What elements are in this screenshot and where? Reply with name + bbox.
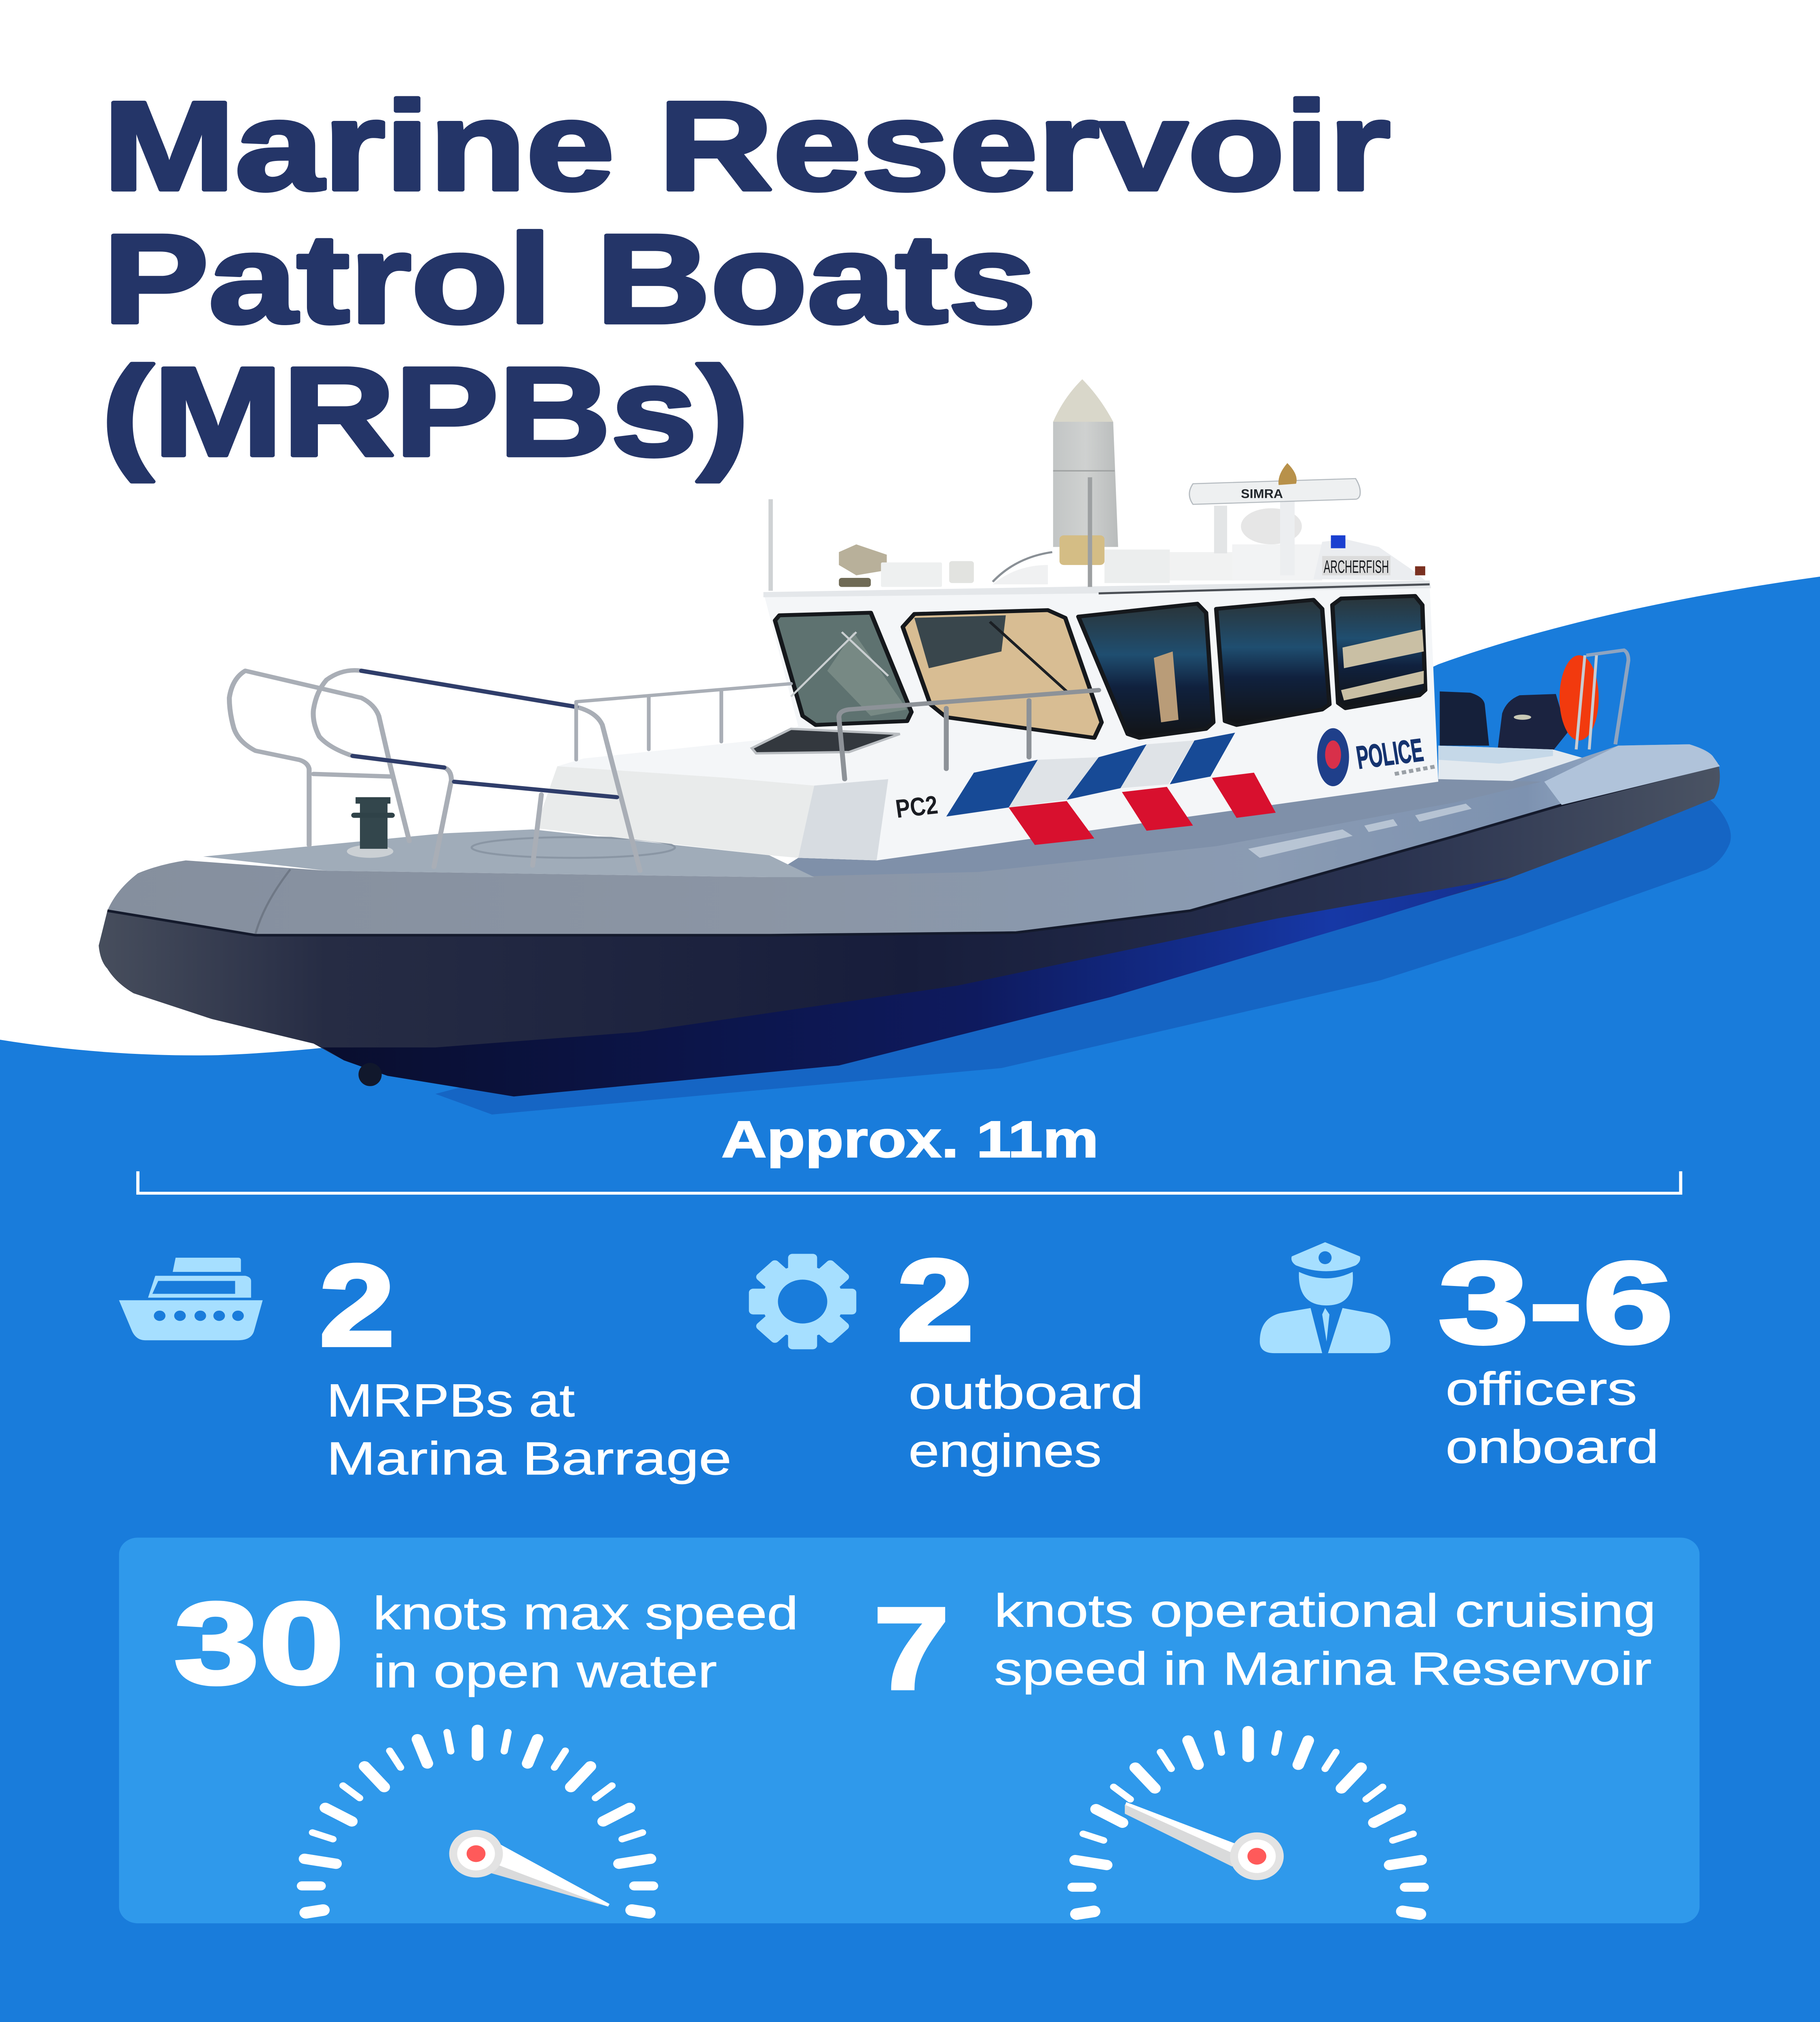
name board: ARCHERFISH xyxy=(1324,557,1389,577)
stat: 30 knots: knots max speed xyxy=(373,1587,798,1639)
stat: 30 knots xyxy=(174,1578,798,1708)
stat: 30 knots: 30 xyxy=(174,1578,344,1708)
stern rail xyxy=(1576,650,1628,749)
police crest xyxy=(1317,728,1349,786)
needle xyxy=(1125,1802,1238,1867)
livery stripes xyxy=(946,733,1276,845)
length label: Approx. 11m xyxy=(721,1110,1099,1168)
deck hatch ring xyxy=(472,837,675,858)
roof band xyxy=(764,580,1431,597)
needle xyxy=(491,1844,609,1907)
gauge: 30 knots xyxy=(302,1730,653,1913)
stat: MRPBs at Marina Barrage: Marina Barrage xyxy=(326,1432,732,1484)
icon: gear xyxy=(749,1254,856,1349)
cabin-front railing xyxy=(839,690,1099,779)
police small mark xyxy=(1395,766,1437,774)
tube highlights xyxy=(1248,804,1472,858)
length bracket xyxy=(138,1171,1681,1193)
cabin superstructure xyxy=(557,583,1438,861)
box corner facet xyxy=(798,779,888,861)
boat shadow on water xyxy=(436,789,1731,1115)
left antenna xyxy=(770,499,771,591)
stat: officers onboard: officers xyxy=(1445,1362,1637,1415)
icon: ship xyxy=(119,1258,263,1340)
box front face xyxy=(535,766,814,858)
stat: officers onboard xyxy=(1438,1237,1674,1473)
stat: MRPBs at Marina Barrage: 2 xyxy=(319,1240,395,1370)
name board xyxy=(1322,556,1390,577)
bow railings xyxy=(229,670,640,871)
stern tube top xyxy=(1544,745,1720,805)
pivot xyxy=(1230,1832,1284,1880)
mast dome xyxy=(1053,379,1118,547)
stat: MRPBs at Marina Barrage xyxy=(319,1240,732,1484)
boat illustration xyxy=(99,379,1731,1115)
hull number: PC2 xyxy=(894,791,940,823)
lower hull dark tube xyxy=(99,764,1720,1095)
gauge: 7 knots xyxy=(1073,1731,1424,1914)
radar xyxy=(1189,463,1360,575)
stat: 7 knots: 7 xyxy=(874,1583,949,1713)
stat: outboard engines: outboard xyxy=(908,1366,1144,1419)
side deck xyxy=(768,779,1541,877)
blue wave background xyxy=(0,577,1820,2022)
roof seam xyxy=(1099,584,1430,593)
pivot xyxy=(449,1830,503,1878)
panel: speed xyxy=(119,1538,1699,1923)
stat: 7 knots: speed in Marina Reservoir xyxy=(994,1643,1652,1694)
tube waterline xyxy=(108,765,1718,935)
title: Patrol Boats xyxy=(103,208,1036,349)
tube bow seam xyxy=(256,869,290,934)
side railings xyxy=(576,684,791,760)
stat: officers onboard: onboard xyxy=(1445,1421,1659,1473)
bollard xyxy=(347,797,395,858)
mast pole xyxy=(1089,477,1090,587)
foredeck hatch xyxy=(752,729,900,753)
police crest centre xyxy=(1325,740,1341,769)
title: (MRPBs) xyxy=(102,341,749,483)
keel blue underside xyxy=(322,877,1509,1096)
stern deck lip xyxy=(1438,746,1553,764)
stat: MRPBs at Marina Barrage: MRPBs at xyxy=(326,1374,575,1426)
upper grey tube xyxy=(108,745,1720,935)
police marking: POLICE xyxy=(1354,732,1426,776)
stat: outboard engines: 2 xyxy=(897,1235,974,1365)
icon: officer xyxy=(1260,1242,1390,1353)
stern deck xyxy=(1438,746,1585,786)
foredeck xyxy=(203,829,814,877)
stat: 7 knots: knots operational cruising xyxy=(994,1584,1656,1637)
radar: SIMRA xyxy=(1241,486,1283,501)
roof equipment xyxy=(839,535,1425,587)
stat: officers onboard: 3-6 xyxy=(1438,1237,1674,1368)
outboard engines xyxy=(1440,692,1568,751)
stat: outboard engines: engines xyxy=(908,1425,1102,1476)
title xyxy=(102,75,1390,483)
stat: 30 knots: in open water xyxy=(373,1645,717,1697)
title: Marine Reservoir xyxy=(103,75,1390,217)
stat: outboard engines xyxy=(897,1235,1144,1476)
bow eye xyxy=(358,1063,382,1086)
stat: 7 knots xyxy=(874,1583,1656,1713)
cabin windows xyxy=(775,596,1425,738)
lifebuoy xyxy=(1560,655,1599,740)
